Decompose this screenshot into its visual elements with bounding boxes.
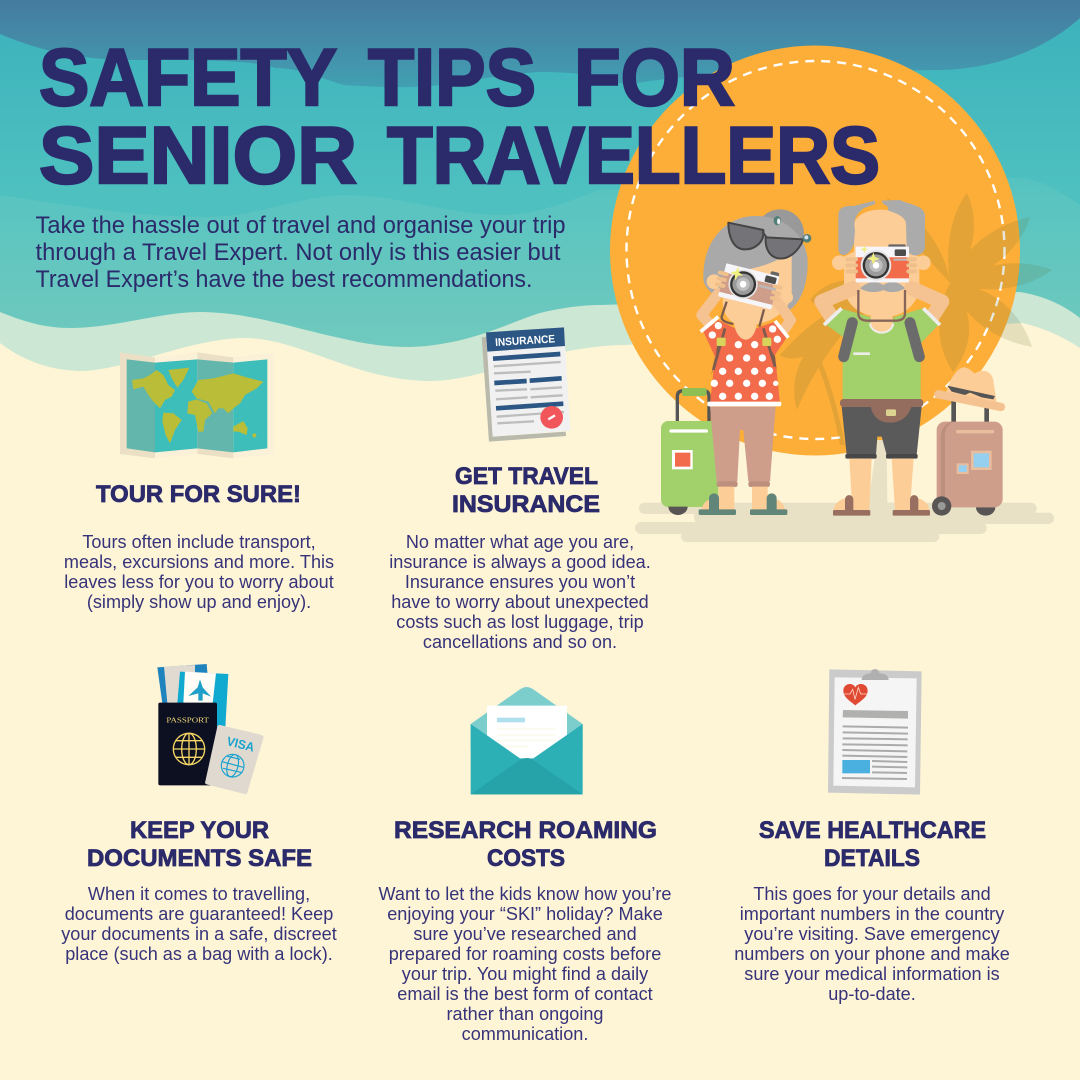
body text: costs such as lost luggage, trip [396,612,644,632]
heading [394,817,657,872]
body text [389,532,651,652]
body text: communication. [462,1024,588,1044]
body text [378,884,672,1044]
title: SAFETY [39,33,337,123]
body text: Insurance ensures you won’t [405,572,635,592]
body text: meals, excursions and more. This [64,552,334,572]
intro text: Travel Expert’s have the best recommendations. [36,266,532,293]
body text: numbers on your phone and make [734,944,1010,964]
panel: research roaming costs [378,687,672,1044]
icon: passport, tickets and visa: VISA [225,734,256,755]
body text: (simply show up and enjoy). [87,592,311,612]
body text [734,884,1010,1004]
body text: up-to-date. [828,984,916,1004]
body text: When it comes to travelling, [88,884,310,904]
heading: GET TRAVEL [455,463,598,490]
panel: get travel insurance [389,327,651,652]
title [39,33,880,201]
icon: open envelope [471,687,583,794]
body text: important numbers in the country [740,904,1005,924]
icon: passport, tickets and visa: PASSPORT [166,715,210,724]
panel: keep your documents safe [61,664,337,964]
body text [64,532,334,612]
illustration: senior travellers [635,200,1054,542]
body text: enjoying your “SKI” holiday? Make [387,904,663,924]
brown suitcase and hat [932,367,1003,516]
body text: place (such as a bag with a lock). [65,944,333,964]
body text: Tours often include transport, [82,532,316,552]
heading: TOUR FOR SURE! [96,481,301,508]
body text: This goes for your details and [753,884,991,904]
intro text [36,212,566,293]
woman sunglasses [728,216,811,259]
body text: insurance is always a good idea. [389,552,651,572]
body text: sure your medical information is [744,964,1000,984]
woman camera [714,259,784,310]
man traveller [822,200,942,516]
icon: insurance document [482,327,570,442]
heading: KEEP YOUR [130,817,269,844]
heading: RESEARCH ROAMING [394,817,657,844]
heading: DOCUMENTS SAFE [87,845,312,872]
body text: you’re visiting. Save emergency [744,924,1001,944]
heading: DETAILS [824,845,920,872]
heading: SAVE HEALTHCARE [759,817,986,844]
body text: email is the best form of contact [397,984,653,1004]
icon: insurance document: INSURANCE [495,333,555,349]
heading: INSURANCE [452,491,600,518]
heading: COSTS [487,845,565,872]
green suitcase [661,388,718,515]
title: FOR [574,33,735,123]
icon: folded world map [120,352,274,458]
body text: your trip. You might find a daily [402,964,649,984]
heading [452,463,600,518]
body text: documents are guaranteed! Keep [65,904,333,924]
heading [87,817,312,872]
sun circle with dashed ring [610,46,1020,456]
body text: leaves less for you to worry about [64,572,334,592]
intro text: through a Travel Expert. Not only is this easier but [36,239,561,266]
panel: save healthcare details [734,669,1010,1004]
heading [759,817,986,872]
icon: passport, tickets and visa [157,664,263,794]
body text: sure you’ve researched and [413,924,637,944]
body text: prepared for roaming costs before [389,944,661,964]
body text: Want to let the kids know how you’re [378,884,672,904]
body text: your documents in a safe, discreet [61,924,337,944]
illustration: palm tree silhouette [780,193,1052,445]
body text: No matter what age you are, [406,532,634,552]
body text: have to worry about unexpected [391,592,649,612]
body text: rather than ongoing [447,1004,603,1024]
body text: cancellations and so on. [423,632,617,652]
ground shadows [635,440,1054,542]
title: SENIOR [39,111,357,201]
panel: tour for sure [64,352,334,612]
body text [61,884,337,964]
title: TIPS [368,33,536,123]
man camera [847,244,915,282]
icon: medical clipboard [828,669,922,795]
title: TRAVELLERS [387,111,880,201]
woman traveller [699,209,811,515]
intro text: Take the hassle out of travel and organise your trip [36,212,566,239]
